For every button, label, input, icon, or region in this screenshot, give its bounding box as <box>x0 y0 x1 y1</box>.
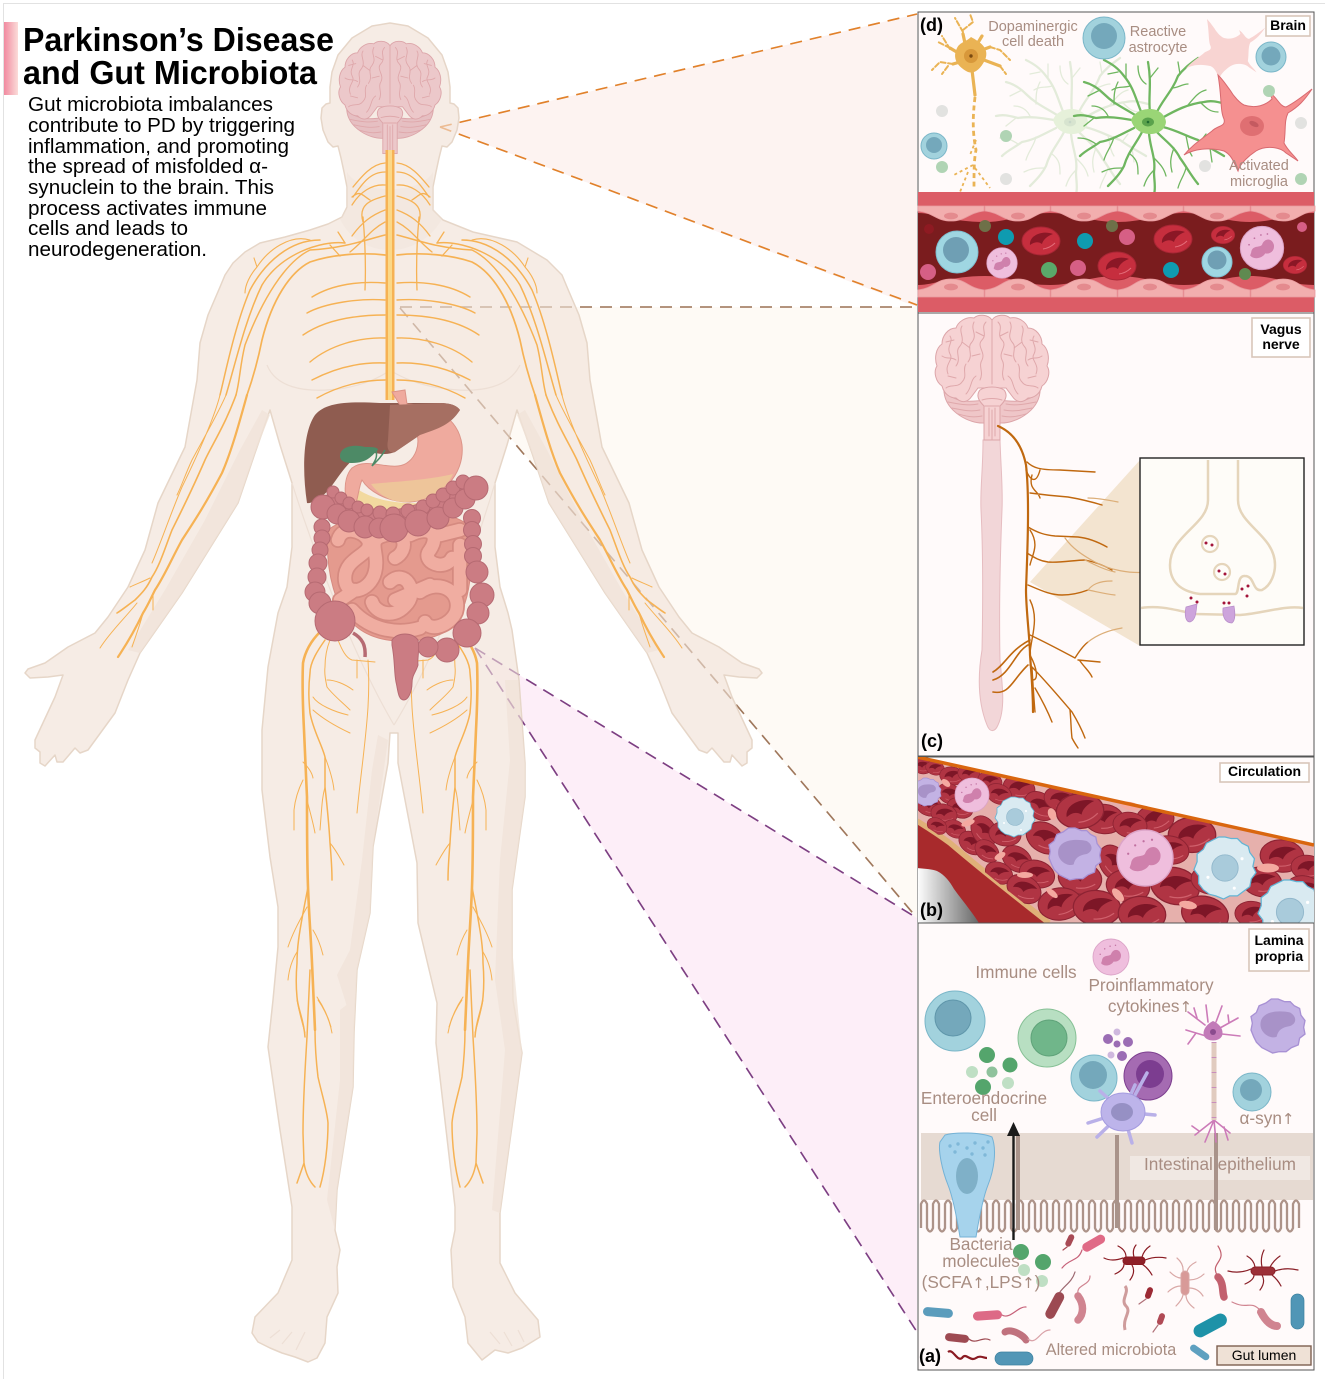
panel letter c: (c) <box>921 731 943 751</box>
description text: inflammation, and promoting <box>28 135 289 158</box>
panel letter a: (a) <box>919 1346 941 1366</box>
description text: process activates immune <box>28 197 267 220</box>
large intestine <box>305 475 494 700</box>
blood vessel <box>918 192 1315 312</box>
panel a: lamina propria and gut <box>918 923 1314 1370</box>
platelets <box>940 777 1279 911</box>
vessel wall <box>917 757 1314 923</box>
zoom cone <box>1030 460 1140 646</box>
spinal cord <box>979 440 1003 731</box>
labels: cytokines↑ <box>1108 996 1192 1016</box>
body contour lines and toes <box>267 365 524 1350</box>
body shading <box>128 172 659 1230</box>
labels: Activated <box>1229 158 1289 174</box>
title block <box>4 21 334 95</box>
tag: Gut lumen <box>1217 1346 1311 1365</box>
labels: astrocyte <box>1129 40 1187 56</box>
icon: enteroendocrine cell <box>939 1133 995 1237</box>
labels: Altered microbiota <box>1046 1341 1176 1359</box>
icon: faded microglia <box>1186 19 1265 79</box>
red blood cells <box>918 759 1314 922</box>
icon: dying dopaminergic neuron <box>932 14 1010 192</box>
magnification wedges <box>400 14 917 1332</box>
intestinal epithelium band <box>921 1133 1313 1232</box>
labels: microglia <box>1230 174 1289 190</box>
title block: Parkinson’s Disease <box>23 21 334 58</box>
icon: pink neuron <box>1186 1005 1240 1142</box>
labels: Enteroendocrine <box>921 1088 1047 1108</box>
labels: (SCFA↑,LPS↑) <box>922 1272 1040 1292</box>
pancreas <box>352 486 425 514</box>
description text: synuclein to the brain. This <box>28 176 274 199</box>
labels: α-syn↑ <box>1240 1108 1294 1128</box>
icon: faded astrocyte <box>996 58 1148 194</box>
gallbladder <box>340 446 385 466</box>
white blood cells <box>918 778 1314 922</box>
labels: molecules <box>942 1251 1020 1271</box>
labels <box>988 19 1289 190</box>
tag: Vagus nerve <box>1252 318 1310 357</box>
labels <box>921 962 1296 1359</box>
labels: Intestinal epithelium <box>1144 1154 1296 1174</box>
icon: reactive astrocyte <box>1074 58 1226 194</box>
tag: Gut lumen: Gut lumen <box>1232 1347 1296 1363</box>
labels: Bacteria <box>949 1234 1013 1254</box>
tag: Lamina propria: propria <box>1255 948 1303 964</box>
panel b: circulation <box>910 756 1325 944</box>
tag: Vagus nerve: nerve <box>1262 336 1300 352</box>
description text: the spread of misfolded α- <box>28 155 268 178</box>
body silhouette <box>25 23 762 1362</box>
dashed zoom lines <box>400 14 917 1332</box>
tag: Lamina propria: Lamina <box>1254 932 1304 948</box>
labels: Proinflammatory <box>1088 975 1214 995</box>
tag: Brain <box>1266 16 1310 36</box>
panel c: vagus nerve <box>918 313 1314 756</box>
liver <box>304 402 460 503</box>
description text: neurodegeneration. <box>28 238 207 261</box>
panel d: brain <box>918 12 1315 313</box>
icon: molecules <box>966 1028 1133 1287</box>
icon: brain in head <box>339 41 441 154</box>
tag: Circulation <box>1220 763 1309 782</box>
faint dashed lines seen through body <box>400 14 917 1332</box>
description text: cells and leads to <box>28 217 188 240</box>
panel letter d: (d) <box>920 15 943 35</box>
nervous system <box>100 150 682 1187</box>
immune cells <box>925 939 1305 1111</box>
tag: Circulation: Circulation <box>1228 763 1301 779</box>
human body figure <box>25 23 762 1362</box>
vagus nerve <box>993 426 1148 748</box>
description text: contribute to PD by triggering <box>28 114 295 137</box>
tag: Vagus nerve: Vagus <box>1260 321 1302 337</box>
labels: Reactive <box>1130 24 1186 40</box>
loose cells and particles <box>921 17 1307 185</box>
synapse inset <box>1140 458 1304 645</box>
bacteria <box>923 1233 1304 1365</box>
icon: activated microglia <box>1184 75 1312 171</box>
description text <box>28 93 295 261</box>
icon: brain <box>935 315 1049 440</box>
icon: dendritic cell <box>1088 1073 1155 1143</box>
liver right lobe <box>387 403 460 452</box>
arrow: molecules crossing epithelium <box>1007 1122 1020 1240</box>
labels: cell <box>971 1105 997 1125</box>
description text: Gut microbiota imbalances <box>28 93 273 116</box>
labels: cell death <box>1002 34 1064 50</box>
labels: Immune cells <box>975 962 1077 982</box>
stomach <box>345 390 462 510</box>
gut organs <box>304 390 494 700</box>
tag: Lamina propria <box>1249 929 1309 971</box>
panel letter b: (b) <box>920 900 943 920</box>
tag: Brain: Brain <box>1270 17 1306 33</box>
small intestine <box>327 511 471 641</box>
title block: and Gut Microbiota <box>23 54 318 91</box>
labels: Dopaminergic <box>988 19 1078 35</box>
